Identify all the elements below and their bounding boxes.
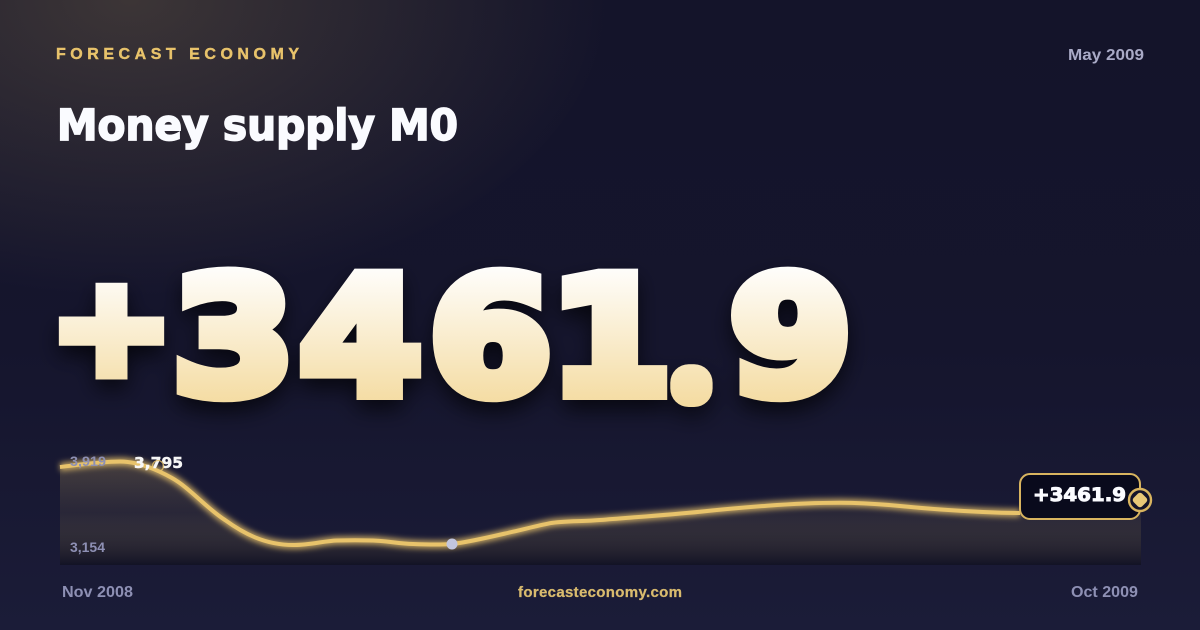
big value: 6 (429, 254, 552, 441)
peak marker (152, 460, 164, 472)
big value (51, 244, 852, 441)
latest value tag (1020, 474, 1140, 519)
big value: + (51, 250, 172, 404)
title: Money supply M0 (57, 101, 458, 151)
big value: . (686, 372, 697, 406)
start date: Nov 2008 (62, 584, 133, 601)
website: forecasteconomy.com (518, 584, 682, 601)
date: May 2009 (1068, 47, 1144, 64)
big value: 4 (300, 244, 422, 431)
sparkline chart (60, 462, 1141, 565)
end date: Oct 2009 (1071, 584, 1138, 601)
chart area fill (60, 462, 1141, 565)
end point marker (1129, 489, 1151, 511)
peak value label: 3,795 (134, 454, 183, 472)
big value: 4 (300, 254, 422, 441)
big value: 1 (550, 244, 672, 431)
big value: 9 (730, 244, 852, 431)
axis max label: 3,919 (70, 453, 106, 469)
big value: 1 (550, 254, 672, 441)
big value: 9 (730, 254, 852, 441)
big value: . (686, 362, 697, 396)
latest value tag: +3461.9 (1033, 484, 1126, 506)
big value: + (51, 260, 172, 414)
big value: 3 (173, 244, 295, 431)
big value: 3 (173, 254, 295, 441)
big value: 6 (429, 244, 552, 431)
line glow (60, 462, 1020, 545)
line (60, 462, 1020, 545)
min marker (446, 538, 458, 550)
brand label: FORECAST ECONOMY (56, 46, 299, 63)
axis min label: 3,154 (70, 539, 105, 555)
